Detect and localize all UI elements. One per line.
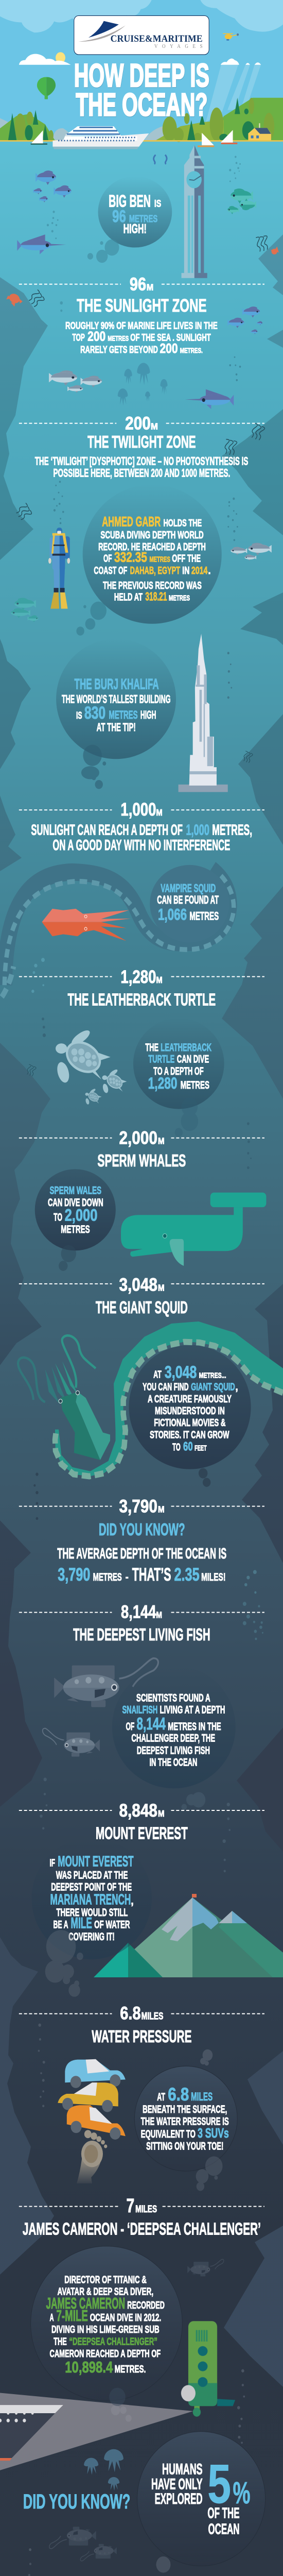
text: Mount Everest fact: IF: [49, 1857, 55, 1869]
panel: Burj Khalifa to vampire squid: [5, 634, 264, 985]
callout: water pressure: THE WATER PRESSURE IS: [141, 2116, 229, 2128]
label: 7 miles: [19, 2195, 264, 2217]
label: 8,144m: 8,144: [121, 1602, 156, 1622]
callout: Mount Everest: [31, 1838, 152, 1959]
callout: leatherback turtle: TURTLE: [148, 1053, 174, 1065]
callout: 5 percent explored: %: [233, 2476, 251, 2510]
heading: the leatherback turtle: THE LEATHERBACK TURTLE: [68, 990, 216, 1009]
icon: Big Ben tower: [182, 145, 207, 278]
callout: Ahmed Gabr: .: [208, 565, 211, 577]
callout: leatherback turtle: 1,280: [148, 1075, 177, 1092]
ghost fish: [49, 2259, 224, 2561]
callout bubble: giant squid: [129, 1345, 251, 1469]
text: average depth: THAT’S: [132, 1564, 171, 1584]
callout: leatherback turtle: LEATHERBACK: [161, 1042, 211, 1054]
icon: Deepsea Challenger submersible: [181, 2321, 235, 2417]
callout: snailfish: SNAILFISH: [122, 1704, 157, 1716]
bubble trail: [33, 1468, 210, 1520]
callout: Ahmed Gabr: 318.21: [145, 589, 167, 603]
text: Mount Everest fact: MILE: [71, 1914, 92, 1932]
icon: sun and small cloud: [19, 52, 71, 65]
icon: turtles: [55, 1028, 127, 1105]
text: Mount Everest fact: DEEPEST POINT OF THE: [51, 1881, 132, 1893]
label: 200m: M: [151, 421, 158, 432]
title: HOW DEEP IS: [74, 57, 209, 94]
text: average depth: 2.35: [174, 1564, 200, 1584]
callout: Ahmed Gabr: AHMED GABR: [102, 514, 161, 530]
callout: Burj Khalifa: THE WORLD’S TALLEST BUILDING: [62, 693, 171, 706]
callout: Ahmed Gabr: METRES: [149, 555, 170, 564]
thought bubbles: [45, 1930, 83, 1997]
text: James Cameron: 7-MILE: [56, 2307, 88, 2325]
text: Mount Everest fact: OF WATER: [94, 1919, 130, 1931]
text: Mount Everest fact: MOUNT EVEREST: [58, 1853, 134, 1870]
callout: Ahmed Gabr: [76, 484, 222, 636]
icon: vampire squid: [42, 909, 131, 941]
bubble trail: [29, 2369, 245, 2551]
label: 1,280m: M: [156, 975, 163, 985]
text: James Cameron: OCEAN DIVE IN 2012.: [90, 2312, 161, 2324]
heading: mount everest: MOUNT EVEREST: [96, 1823, 188, 1843]
callout: 5 percent explored: EXPLORED: [155, 2490, 203, 2507]
text: giant squid: GIANT SQUID: [191, 1381, 235, 1393]
callout: James Cameron: [31, 2246, 182, 2401]
label: 8,848m: M: [158, 1808, 165, 1819]
callout: leatherback turtle: METRES: [181, 1079, 209, 1091]
text: sunlight paragraph: RARELY GETS BEYOND: [80, 344, 158, 355]
callout: Ahmed Gabr: COAST OF: [94, 565, 127, 577]
text: average depth: -: [126, 1571, 129, 1583]
text: James Cameron: RECORDED: [127, 2299, 165, 2311]
text: Mount Everest fact: THERE WOULD STILL: [56, 1907, 128, 1919]
callout: snailfish: METRES IN THE: [168, 1721, 221, 1733]
icon: jellyfish: [84, 2449, 123, 2490]
callout: 5 percent explored: OF THE: [207, 2505, 240, 2521]
callout: Burj Khalifa: HIGH: [140, 709, 156, 721]
label: 6.8 miles: [19, 2004, 264, 2024]
callout: 5 percent explored: OCEAN: [208, 2521, 240, 2537]
text: sunlight paragraph: OF THE SEA . SUNLIGHT: [130, 332, 211, 343]
callout: vampire squid: VAMPIRE SQUID: [161, 882, 216, 895]
callout: Burj Khalifa: AT THE TIP!: [97, 721, 136, 734]
text: giant squid: AT: [153, 1369, 162, 1381]
callout: Burj Khalifa: METRES: [109, 709, 138, 721]
text: James Cameron: [46, 2274, 165, 2376]
label: 8,144m: M: [156, 1609, 162, 1620]
panel: Everest text and water pressure: [19, 1838, 264, 2239]
text: giant squid: A CREATURE FAMOUSLY: [148, 1393, 232, 1405]
logo box: CRUISE&MARITIME: [111, 33, 203, 44]
text: James Cameron: METRES.: [115, 2363, 146, 2375]
heading: sperm whales: SPERM WHALES: [97, 1150, 186, 1171]
callout: Big Ben: IS: [154, 197, 161, 209]
text: giant squid: FEET: [194, 1444, 207, 1453]
callout: sperm whales: SPERM WALES: [49, 1184, 101, 1197]
label: 2,000m: 2,000: [119, 1128, 157, 1148]
callout: Ahmed Gabr: OF: [103, 553, 112, 565]
callout: water pressure: [134, 2066, 237, 2191]
callout: sperm whales: 2,000: [65, 1206, 97, 1225]
fish schools: [33, 171, 260, 317]
panel: commercial aircraft and Challenger Deep: [19, 2556, 283, 2576]
icon: helicopter: [223, 33, 239, 41]
text: James Cameron: CAMERON REACHED A DEPTH OF: [49, 2348, 161, 2360]
heading: the sunlight zone: THE SUNLIGHT ZONE: [77, 296, 207, 316]
text: Mount Everest fact: MARIANA TRENCH: [50, 1891, 131, 1908]
callout: water pressure: 6.8: [168, 2084, 189, 2105]
text: Mount Everest fact: [49, 1853, 134, 1943]
text: Mount Everest fact: BE A: [53, 1919, 68, 1931]
callout: water pressure: EQUIVALENT TO: [141, 2128, 196, 2140]
heading: did you know: DID YOU KNOW?: [23, 2490, 130, 2513]
label: 2,000m: [19, 1128, 264, 1148]
callout: snailfish: CHALLENGER DEEP, THE: [131, 1733, 215, 1744]
callout: Ahmed Gabr: HOLDS THE: [163, 517, 202, 529]
callout: vampire squid: [150, 865, 229, 942]
callout: 5 percent explored: HUMANS: [162, 2461, 203, 2478]
text: Mount Everest fact: WAS PLACED AT THE: [56, 1869, 128, 1882]
callout: Ahmed Gabr: 332.35: [114, 550, 147, 565]
label: 6.8 miles: MILES: [142, 2011, 164, 2022]
text: giant squid: 3,048: [165, 1362, 197, 1382]
text: giant squid: [143, 1362, 238, 1453]
icon: swordfish: [17, 234, 66, 254]
logo box: [74, 15, 209, 55]
label: 2,000m: M: [158, 1136, 165, 1146]
text: sunlight paragraph: 200: [87, 329, 105, 344]
label: 3,048m: M: [158, 1283, 165, 1293]
landscape: hills and trees: [0, 98, 283, 142]
callout: sperm whales: [35, 1169, 116, 1271]
label: 96m: 96: [130, 275, 146, 295]
text: sunlight paragraph: 200: [160, 342, 178, 357]
callout: snailfish: OF: [126, 1721, 134, 1733]
bubble trail: [38, 2024, 213, 2107]
text: sunlight depth: METRES,: [212, 822, 252, 838]
callout: water pressure: MILES: [191, 2091, 213, 2103]
icon: jellyfish: [118, 363, 168, 405]
label: 3,790m: M: [158, 1504, 165, 1515]
callout: Ahmed Gabr: THE PREVIOUS RECORD WAS: [103, 580, 202, 591]
text: Mount Everest fact: ,: [131, 1895, 134, 1907]
bubble trail: [31, 958, 45, 993]
callout: water pressure: AT: [157, 2091, 165, 2103]
heading: the deepest living fish: THE DEEPEST LIVING FISH: [73, 1624, 210, 1644]
icon: giant squid: [18, 1335, 110, 1460]
callout: 5 percent explored: [137, 2432, 266, 2566]
callout: leatherback turtle: CAN DIVE: [177, 1053, 209, 1065]
text: sunlight paragraph: [65, 320, 218, 357]
text: giant squid: TO: [172, 1441, 181, 1453]
callout: 5 percent explored: HAVE ONLY: [151, 2476, 203, 2493]
callout: Burj Khalifa: IS: [76, 710, 82, 721]
label: 7 miles: 7: [127, 2195, 134, 2217]
icon: Burj Khalifa tower: [179, 634, 228, 792]
icon: cruise ship: [52, 126, 149, 149]
label: 3,048m: 3,048: [119, 1275, 157, 1295]
bubble trail: [28, 2556, 220, 2576]
heading: did you know: DID YOU KNOW?: [99, 1520, 185, 1539]
icon: scuba diver: [48, 528, 70, 608]
callout: Big Ben: [87, 176, 172, 263]
bubble trail: [227, 652, 232, 699]
callout: Big Ben: METRES: [129, 213, 157, 224]
label: 3,790m: 3,790: [119, 1497, 157, 1517]
bubble trail: [244, 1570, 257, 1594]
callout: water pressure: SITTING ON YOUR TOE!: [146, 2141, 223, 2153]
bubble trails: [47, 156, 241, 312]
panel: leatherback turtle and sperm whales: [2, 958, 266, 1271]
callout: snailfish: 8,144: [137, 1714, 166, 1733]
callout: Big Ben: 96: [112, 207, 126, 226]
text: James Cameron: “DEEPSEA CHALLENGER”: [69, 2336, 157, 2348]
text: sunlight depth: 1,000: [186, 822, 209, 838]
background: sky: [0, 0, 283, 142]
label: 1,000m: 1,000: [120, 800, 156, 820]
callout: Burj Khalifa: THE BURJ KHALIFA: [75, 676, 159, 692]
panel: giant squid and average depth: [18, 1275, 283, 1594]
clouds at top: [0, 0, 283, 32]
callout: vampire squid: METRES: [189, 910, 219, 923]
callout: leatherback turtle: [133, 1018, 224, 1137]
icon: cottage: [248, 123, 271, 141]
label: 8,848m: [19, 1801, 264, 1821]
callout: snailfish: DEEPEST LIVING FISH: [137, 1744, 210, 1757]
text: James Cameron: DIRECTOR OF TITANIC &: [64, 2274, 147, 2286]
text: sunlight paragraph: ROUGHLY 90% OF MARINE LIFE LIVES IN THE: [65, 320, 218, 331]
bubble trail: [40, 1777, 231, 1872]
heading: water pressure: WATER PRESSURE: [92, 2026, 192, 2046]
text: average depth: [57, 1545, 226, 1584]
callout: Ahmed Gabr: METRES: [169, 594, 190, 603]
icon: seahorses: [154, 155, 167, 164]
text: James Cameron: DIVING IN HIS LIME-GREEN SUB: [51, 2324, 160, 2335]
callout: Burj Khalifa: [56, 639, 176, 789]
seaweed: [244, 751, 253, 763]
icon: hot air balloon: [37, 77, 56, 99]
crabs and seaweed: [6, 232, 279, 310]
label: 1,280m: 1,280: [120, 968, 156, 988]
icon: tentacle around vampire squid: [5, 869, 234, 985]
label: 1,280m: [19, 968, 264, 988]
panel: twilight zone: [11, 318, 272, 636]
right clouds and light beams: [206, 58, 261, 122]
heading: the twilight zone: THE TWILIGHT ZONE: [87, 432, 196, 452]
text: giant squid: 60: [183, 1439, 193, 1453]
text: giant squid: STORIES. IT CAN GROW: [150, 1429, 229, 1441]
text: sunlight depth: [31, 822, 252, 853]
callout: vampire squid: CAN BE FOUND AT: [157, 894, 219, 906]
callout: Ahmed Gabr: RECORD. HE REACHED A DEPTH: [98, 541, 206, 553]
panel: deepest fish and Mount Everest: [19, 1602, 264, 1872]
icon: snailfish: [43, 1658, 158, 1757]
callout: Big Ben: HIGH!: [123, 222, 147, 236]
label: 1,000m: M: [156, 807, 163, 818]
icon: Mount Everest: [94, 1894, 283, 1977]
callout: snailfish: IN THE OCEAN: [149, 1756, 197, 1769]
callout: sperm whales: TO: [54, 1211, 62, 1224]
light beam with Titanic silhouette: [0, 2388, 193, 2470]
text: sunlight paragraph: TOP: [72, 332, 85, 343]
bubble trails: [53, 357, 241, 541]
panel: header and sunlight zone: [0, 0, 283, 317]
text: giant squid: YOU CAN FIND: [143, 1381, 189, 1393]
callout: 5 percent explored: 5: [207, 2454, 231, 2515]
callout: Ahmed Gabr: OFF THE: [172, 553, 201, 565]
title: [74, 57, 209, 123]
text: average depth: 3,790: [58, 1564, 90, 1584]
callout: Burj Khalifa: 830: [84, 703, 105, 722]
callout: Ahmed Gabr: SCUBA DIVING DEPTH WORLD: [100, 529, 204, 541]
text: giant squid: METRES...: [199, 1371, 226, 1380]
text: sunlight paragraph: METRES.: [180, 347, 203, 354]
callout: water pressure: 3 SUVs: [198, 2126, 229, 2141]
heading: the giant squid: THE GIANT SQUID: [96, 1298, 188, 1317]
text: sunlight depth: SUNLIGHT CAN REACH A DEPTH OF: [31, 822, 183, 838]
text: twilight description: [35, 455, 248, 480]
callout: Ahmed Gabr: 2014: [191, 565, 208, 577]
text: giant squid: FICTIONAL MOVIES &: [154, 1417, 226, 1429]
label: 6.8 miles: 6.8: [120, 2004, 141, 2024]
seaweed: [15, 423, 264, 523]
icon: sailboats: [31, 130, 237, 147]
text: James Cameron: 10,898.4: [65, 2359, 113, 2376]
text: James Cameron: THE: [54, 2336, 67, 2348]
callout: Ahmed Gabr: IN: [182, 565, 189, 577]
label: 3,048m: [19, 1275, 264, 1295]
shoreline: [0, 140, 283, 142]
label: 8,144m: [19, 1602, 264, 1622]
callout: Ahmed Gabr: DAHAB, EGYPT: [130, 565, 180, 577]
panel: James Cameron dive: [0, 2246, 266, 2566]
bubble trail: [243, 1602, 263, 1640]
label: 96m: M: [147, 282, 153, 293]
icon: swordfish: [185, 389, 234, 409]
callout: leatherback turtle: THE: [145, 1042, 158, 1054]
text: giant squid: ,: [235, 1381, 238, 1393]
icon: stacked cars on foot: [58, 2059, 126, 2183]
label: 96m: [19, 275, 264, 295]
label: 200m: 200: [125, 414, 151, 434]
callout: Ahmed Gabr: HELD AT: [114, 591, 143, 603]
callout: snailfish: SCIENTISTS FOUND A: [136, 1692, 210, 1704]
icon: sperm whale: [121, 1193, 266, 1266]
title: THE OCEAN?: [76, 88, 207, 123]
label: 8,848m: 8,848: [119, 1801, 157, 1821]
text: average depth: MILES!: [201, 1571, 226, 1583]
callout: sperm whales: CAN DIVE DOWN: [48, 1197, 103, 1209]
label: 1,000m: [19, 800, 264, 820]
callout: snailfish: [112, 1665, 236, 1810]
label: 3,790m: [19, 1497, 264, 1517]
logo box: VOYAGES: [154, 43, 203, 49]
callout: water pressure: BENEATH THE SURFACE,: [143, 2104, 227, 2115]
text: giant squid: MISUNDERSTOOD IN: [155, 1405, 225, 1417]
callout: Big Ben: BIG BEN: [109, 192, 151, 211]
seaweed and bubbles: [27, 1018, 252, 1169]
text: James Cameron: AVATAR & DEEP SEA DIVER,: [58, 2286, 153, 2298]
label: 200m: [19, 414, 264, 434]
callout: leatherback turtle: TO A DEPTH OF: [153, 1065, 204, 1077]
label: 7 miles: MILES: [135, 2204, 157, 2214]
text: James Cameron: A: [49, 2312, 54, 2324]
callout: snailfish: LIVING AT A DEPTH: [160, 1704, 225, 1716]
callout: vampire squid: 1,066: [158, 906, 187, 924]
text: James Cameron: JAMES CAMERON: [46, 2295, 125, 2313]
text: sunlight paragraph: METRES: [108, 334, 129, 343]
callout: sperm whales: METRES: [61, 1224, 90, 1235]
icon: giant tentacle: [55, 1321, 283, 1477]
text: average depth: METRES: [93, 1571, 122, 1583]
small fish: [11, 318, 272, 622]
text: Mount Everest fact: COVERING IT!: [68, 1931, 115, 1943]
tentacle end: [2, 967, 13, 997]
